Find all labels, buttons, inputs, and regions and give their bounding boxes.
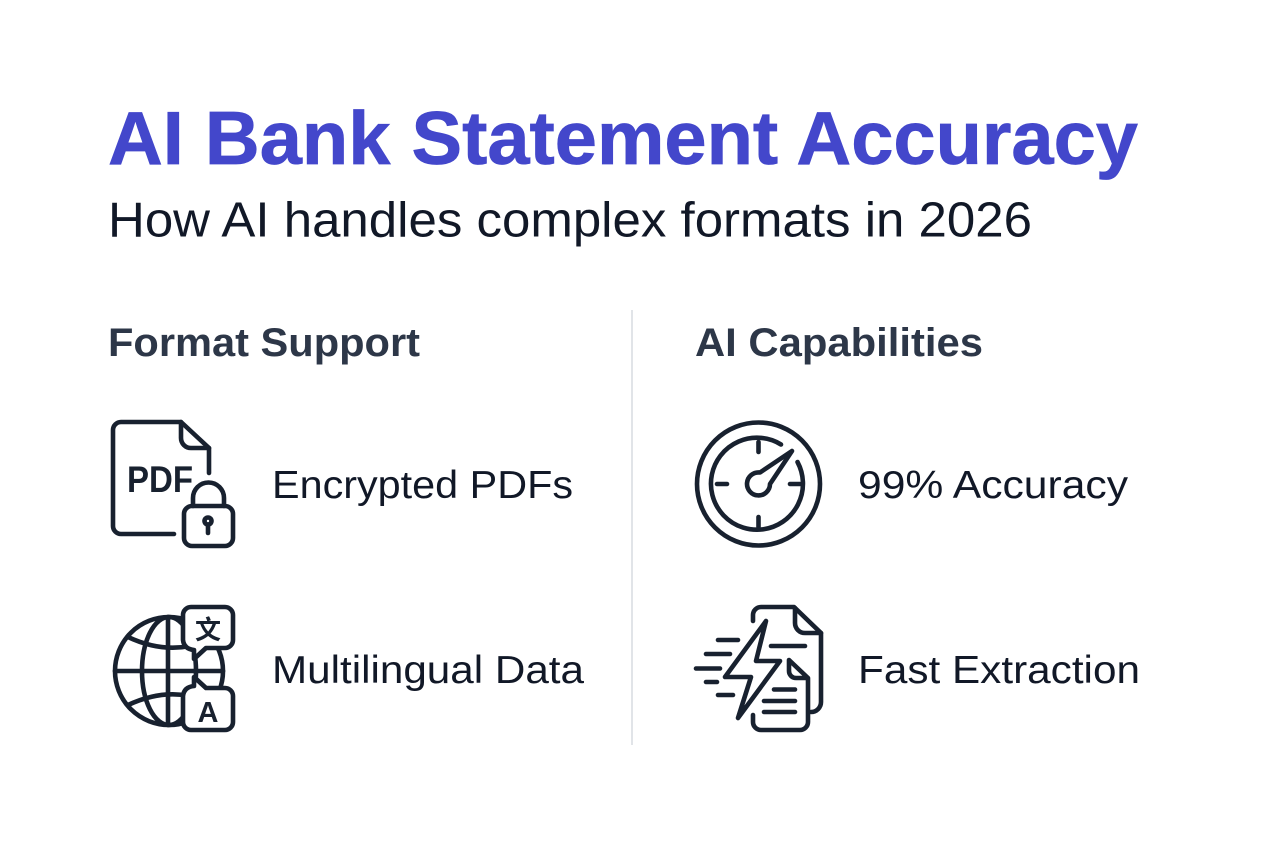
label: fast extraction: Fast Extraction [858, 649, 1140, 692]
heading: AI capabilities: AI Capabilities [695, 321, 983, 365]
icon: multilingual globe: A [198, 697, 219, 729]
icon: encrypted PDF [113, 422, 233, 546]
label: encrypted PDFs: Encrypted PDFs [272, 464, 573, 507]
icon: fast extraction [696, 607, 821, 730]
icon: multilingual globe: 文 [195, 615, 221, 645]
title: AI Bank Statement Accuracy [108, 96, 1138, 180]
label: multilingual data: Multilingual Data [272, 649, 585, 692]
heading: format support: Format Support [108, 321, 420, 365]
icon: multilingual globe [115, 607, 233, 730]
label: 99% accuracy: 99% Accuracy [858, 464, 1129, 507]
subtitle: How AI handles complex formats in 2026 [108, 194, 1032, 248]
icon: encrypted PDF: PDF [127, 459, 193, 500]
icon: accuracy gauge [697, 422, 820, 546]
